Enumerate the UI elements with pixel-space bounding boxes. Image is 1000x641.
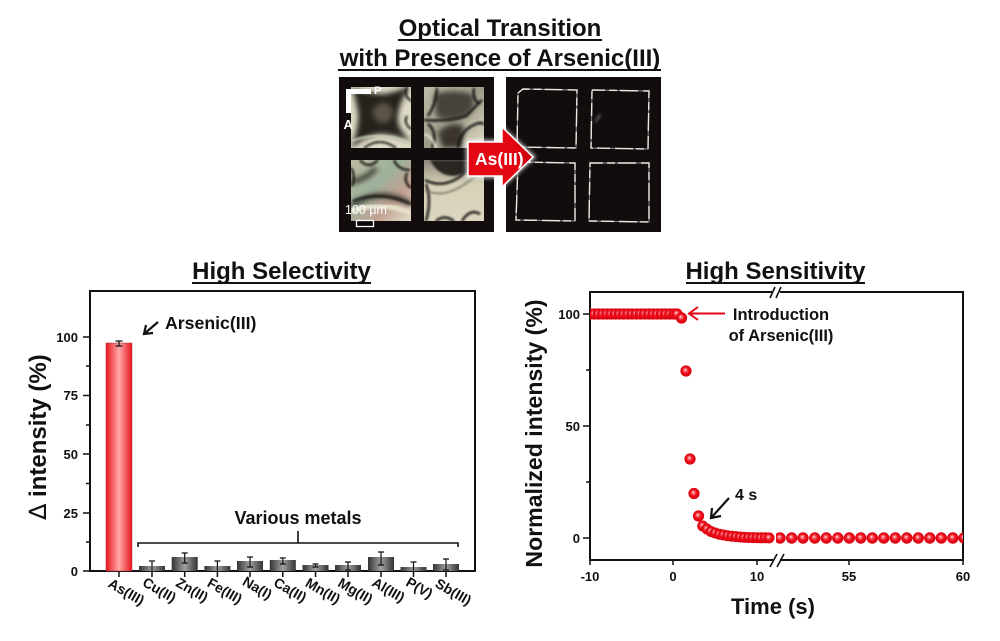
polarizer axes <box>344 85 381 132</box>
x tick labels: Al(III) <box>369 574 408 605</box>
title: with Presence of Arsenic(III) <box>339 45 660 72</box>
polarizer axes: A <box>344 117 354 132</box>
arrow: As(III) transition: As(III) <box>475 149 524 169</box>
panel: micrograph after arsenic <box>506 77 661 232</box>
scatter chart: sensitivity <box>521 287 970 619</box>
x tick labels: Ca(II) <box>271 574 309 605</box>
y tick labels: 25 <box>64 506 78 521</box>
callout: introduction of arsenic: of Arsenic(III) <box>729 327 833 345</box>
x tick labels: Mn(II) <box>303 574 343 607</box>
x tick labels: -10 <box>581 569 599 584</box>
scale bar: 100 µm <box>345 203 387 217</box>
arsenic bar <box>106 343 132 571</box>
x tick labels: P(V) <box>403 574 436 602</box>
x tick labels: 10 <box>750 569 764 584</box>
heading: High Selectivity: High Selectivity <box>192 258 372 285</box>
micrograph cell bottom right <box>424 160 484 221</box>
x tick labels: Fe(III) <box>205 574 245 607</box>
x tick labels: 60 <box>956 569 970 584</box>
y axis title: ∆ intensity (%) <box>24 354 52 521</box>
callout: introduction of arsenic: Introduction <box>733 306 829 324</box>
title <box>338 15 661 72</box>
bar chart: selectivity <box>24 291 475 608</box>
x tick labels: 55 <box>842 569 856 584</box>
bracket: various metals: Various metals <box>234 508 362 528</box>
x tick labels: Zn(II) <box>173 574 211 605</box>
y tick labels: 50 <box>64 447 78 462</box>
data points: plateau <box>774 532 970 544</box>
data points: transition <box>676 312 704 522</box>
error bars <box>116 341 449 571</box>
data points: baseline <box>584 308 683 320</box>
panel: micrograph before arsenic <box>339 77 494 232</box>
y axis title: Normalized intensity (%) <box>521 299 547 568</box>
x tick labels <box>581 569 970 584</box>
x tick labels: As(III) <box>106 575 147 608</box>
micrograph cell bottom left <box>351 160 411 221</box>
x tick labels: 0 <box>669 569 677 584</box>
y tick labels <box>56 330 78 579</box>
arrow: As(III) transition <box>466 124 536 190</box>
x tick labels <box>106 573 474 608</box>
y tick labels: 75 <box>64 388 78 403</box>
x tick labels: Na(I) <box>240 573 275 602</box>
bracket: various metals <box>138 508 458 547</box>
data points: decay <box>697 520 774 543</box>
axis break marks <box>770 287 784 567</box>
heading: High Sensitivity: High Sensitivity <box>685 258 866 285</box>
micrograph cell top right <box>424 87 484 148</box>
callout: Arsenic(III): Arsenic(III) <box>165 313 257 333</box>
y tick labels: 0 <box>71 564 78 579</box>
x tick labels: Mg(II) <box>335 574 376 607</box>
y tick labels: 100 <box>56 330 78 345</box>
y tick labels: 0 <box>573 531 580 546</box>
polarizer axes: P <box>374 85 381 97</box>
callout: introduction of arsenic <box>689 306 833 345</box>
title: Optical Transition <box>399 15 601 42</box>
y tick labels: 50 <box>566 419 580 434</box>
y tick labels: 100 <box>558 307 580 322</box>
callout: 4 s <box>711 487 757 518</box>
x tick labels: Sb(III) <box>433 575 474 608</box>
comparison metal bars <box>139 557 459 571</box>
x tick labels: Cu(II) <box>140 574 179 606</box>
micrograph cell top left <box>351 86 412 148</box>
plot frame and ticks <box>83 291 475 577</box>
callout: 4 s: 4 s <box>735 487 757 504</box>
x axis title: Time (s) <box>731 594 815 619</box>
scale bar <box>345 203 387 226</box>
y tick labels <box>558 307 580 546</box>
plot frame and ticks <box>583 292 963 565</box>
